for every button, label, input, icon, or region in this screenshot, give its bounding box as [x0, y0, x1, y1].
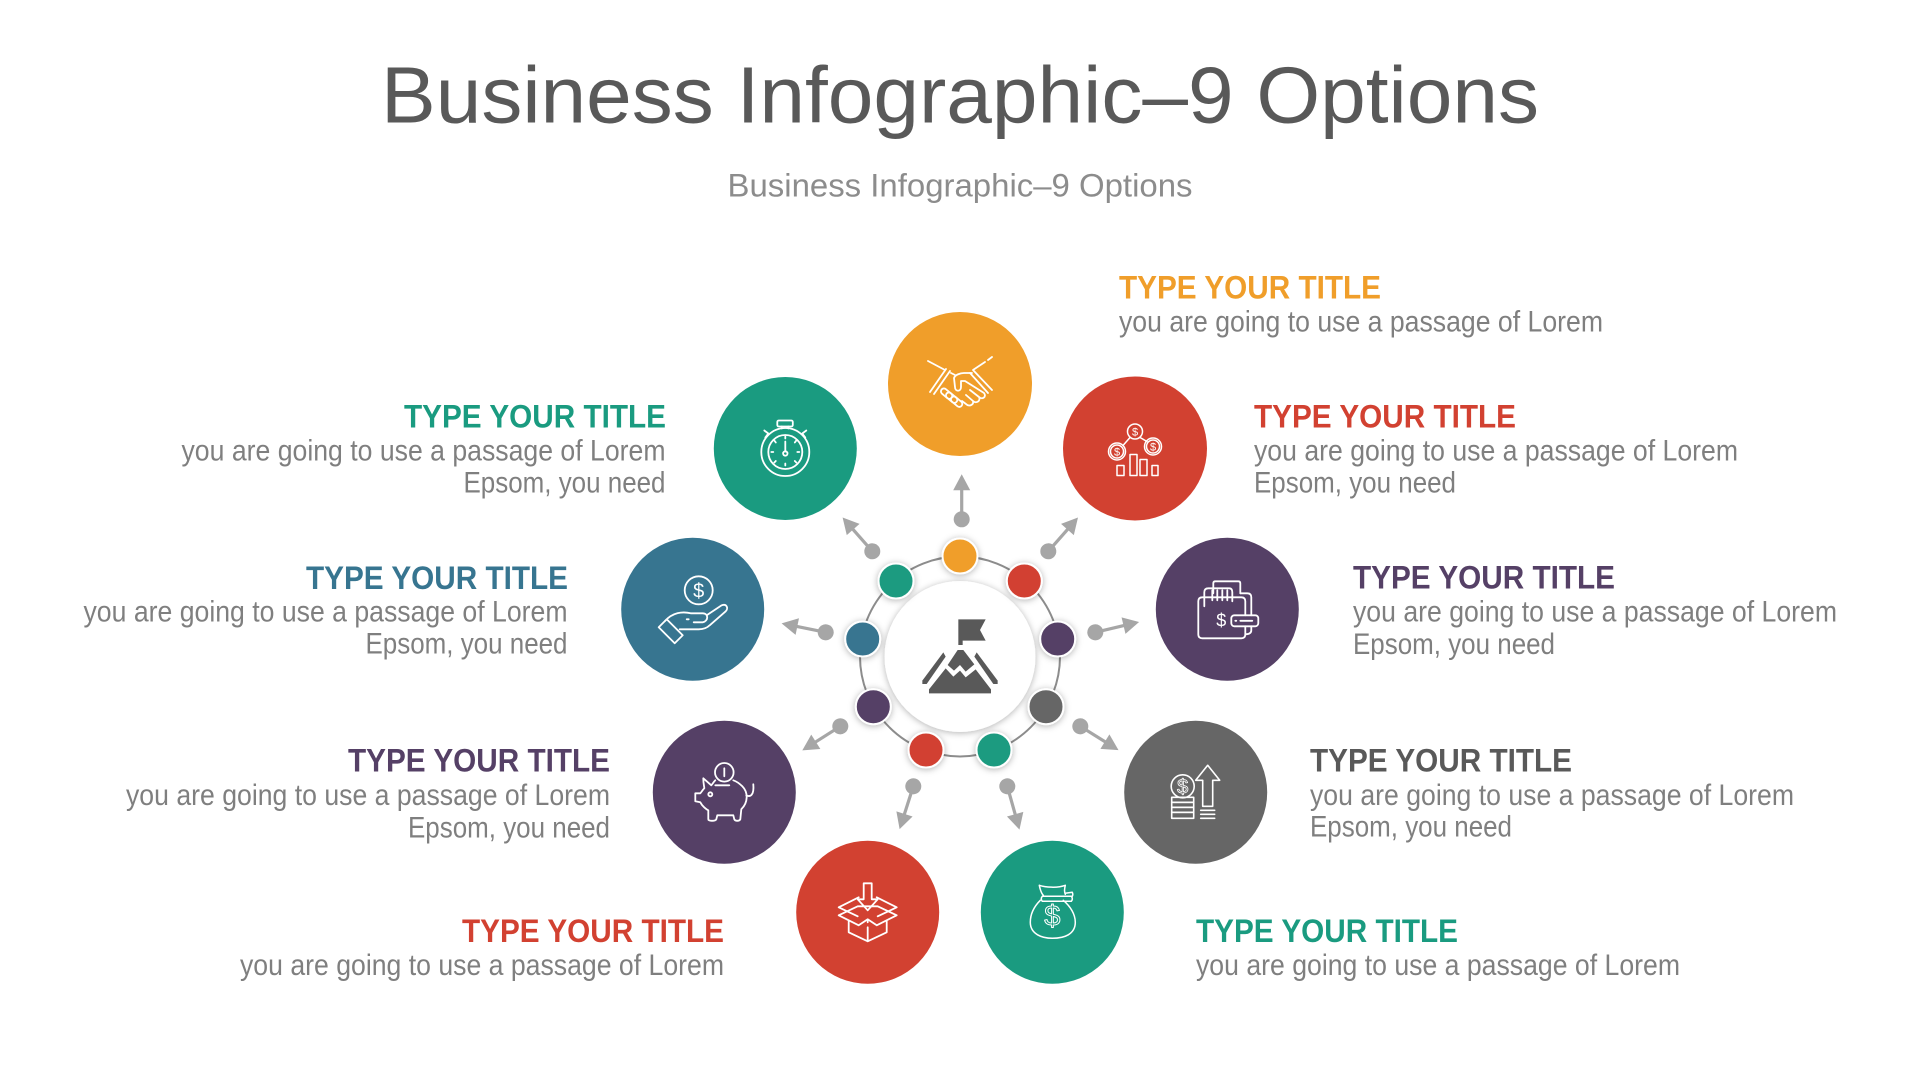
blue circle: [621, 538, 764, 681]
icon: hand holding coin: $: [693, 580, 704, 602]
option text line 2: Epsom, you need: [1254, 466, 1456, 500]
option text: you are going to use a passage of Lorem: [1196, 949, 1680, 982]
option title: TYPE YOUR TITLE: [1353, 559, 1615, 595]
icon: hand holding coin: [659, 576, 727, 643]
icon: mountain with flag: [922, 619, 998, 693]
ring dots: [845, 538, 1075, 768]
option title: TYPE YOUR TITLE: [306, 560, 568, 596]
option: teal money bag: [981, 841, 1680, 984]
option: red box: [240, 841, 939, 984]
option text line 2: Epsom, you need: [366, 628, 568, 660]
option: gray growth coins: [1124, 721, 1794, 864]
icon: coins and up arrow: [1171, 765, 1220, 818]
option: purple wallet: [1156, 538, 1837, 681]
icon: coins and bars: [1108, 424, 1162, 476]
ring: [860, 556, 1060, 756]
arrows: [780, 474, 1141, 832]
teal circle: [714, 377, 857, 520]
option text: you are going to use a passage of Lorem: [126, 779, 610, 812]
icon: open box with arrow: [839, 883, 897, 941]
icon: stopwatch: [761, 420, 809, 476]
subtitle: Business Infographic–9 Options: [728, 168, 1192, 204]
orange circle: [888, 312, 1032, 456]
option title: TYPE YOUR TITLE: [1310, 743, 1572, 779]
icon: handshake: [928, 357, 992, 408]
purple circle: [653, 721, 796, 864]
gray circle: [1124, 721, 1267, 864]
option title: TYPE YOUR TITLE: [404, 399, 666, 435]
option text: you are going to use a passage of Lorem: [1254, 434, 1738, 467]
option text: you are going to use a passage of Lorem: [1353, 596, 1837, 629]
option text: you are going to use a passage of Lorem: [182, 434, 666, 468]
option title: TYPE YOUR TITLE: [1254, 399, 1516, 435]
central hub diagram: [845, 538, 1075, 768]
option title: TYPE YOUR TITLE: [1119, 269, 1381, 305]
option text: you are going to use a passage of Lorem: [240, 949, 724, 982]
option title: TYPE YOUR TITLE: [348, 743, 610, 779]
title: Business Infographic–9 Options: [381, 50, 1539, 140]
option: red coins chart: [1063, 376, 1738, 520]
icon: money bag: [1030, 885, 1075, 938]
center circle: [884, 581, 1036, 732]
option text: you are going to use a passage of Lorem: [1119, 306, 1603, 339]
icon: piggy bank: [695, 763, 753, 821]
option: blue hand with coin: [84, 538, 764, 681]
icon: coins and up arrow: $: [1177, 776, 1188, 798]
option text line 2: Epsom, you need: [1353, 628, 1555, 661]
option title: TYPE YOUR TITLE: [1196, 913, 1458, 949]
option: orange handshake: [888, 269, 1603, 456]
option: purple piggy bank: [126, 721, 796, 864]
option text: you are going to use a passage of Lorem: [84, 596, 568, 629]
icon: coins and bars: $: [1114, 446, 1120, 458]
option text line 2: Epsom, you need: [464, 467, 666, 500]
option title: TYPE YOUR TITLE: [462, 913, 724, 949]
icon: wallet: $: [1216, 610, 1226, 630]
option text line 2: Epsom, you need: [408, 811, 610, 844]
icon: money bag: $: [1044, 900, 1060, 932]
icon: coins and bars: $: [1132, 426, 1138, 438]
option text: you are going to use a passage of Lorem: [1310, 779, 1794, 812]
purple circle: [1156, 538, 1299, 681]
teal circle: [981, 841, 1124, 984]
icon: coins and bars: $: [1150, 442, 1156, 454]
icon: wallet: [1198, 581, 1258, 638]
red circle: [1063, 376, 1207, 520]
red circle: [796, 841, 939, 984]
option: teal stopwatch: [182, 377, 857, 520]
option text line 2: Epsom, you need: [1310, 811, 1512, 844]
